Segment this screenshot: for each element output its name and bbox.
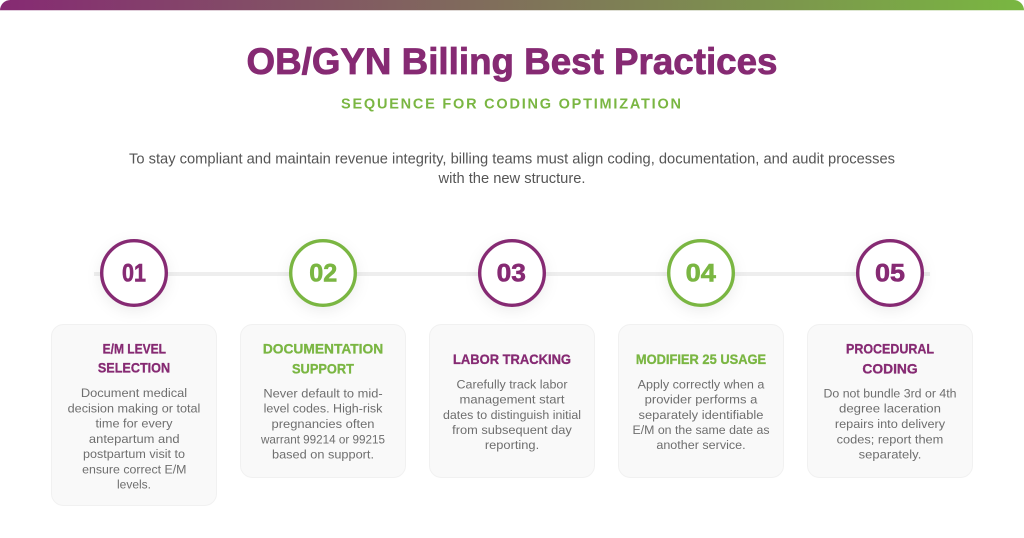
heading: documentation support [263, 342, 383, 376]
body text: modifier 25 usage: separately identifiable [638, 408, 764, 422]
top gradient bar [0, 0, 1024, 10]
panel: procedural coding [808, 324, 972, 478]
body text: procedural coding: separately. [859, 448, 921, 462]
body text: documentation support: level codes. High-risk [264, 402, 383, 416]
body text: labor tracking: reporting. [485, 438, 539, 452]
body text: modifier 25 usage: provider performs a [645, 393, 758, 407]
body text: labor tracking: Carefully track labor [456, 378, 568, 392]
step 04 marker: 04 [686, 260, 716, 288]
subtitle: SEQUENCE FOR CODING OPTIMIZATION [341, 96, 681, 112]
body text: modifier 25 usage: another service. [656, 438, 746, 452]
body text: labor tracking: management start [460, 393, 565, 407]
body text: documentation support: warrant 99214 or 99215 [260, 432, 385, 446]
step 03 marker [480, 241, 544, 305]
heading: procedural coding: PROCEDURAL [846, 342, 934, 357]
body text: E/M level selection: levels. [117, 477, 151, 491]
heading: labor tracking: LABOR TRACKING [453, 352, 571, 367]
body text: E/M level selection: antepartum and [89, 432, 180, 446]
body text: documentation support: Never default to mid- [263, 386, 383, 400]
panel: documentation support [240, 324, 406, 478]
body text: E/M level selection: Document medical [81, 386, 187, 400]
body text: labor tracking: dates to distinguish initial [443, 408, 581, 422]
body text: procedural coding: Do not bundle 3rd or 4th [824, 386, 957, 400]
heading: E/M level selection: SELECTION [98, 361, 170, 376]
heading: documentation support: SUPPORT [292, 361, 355, 376]
body text: procedural coding: repairs into delivery [835, 417, 946, 431]
heading: documentation support: DOCUMENTATION [263, 342, 383, 357]
title: OB/GYN Billing Best Practices [246, 41, 778, 82]
body text: E/M level selection: ensure correct E/M [82, 462, 186, 476]
body text: E/M level selection: postpartum visit to [83, 447, 185, 461]
heading: modifier 25 usage: MODIFIER 25 USAGE [636, 352, 766, 367]
panel: modifier 25 usage [618, 324, 784, 478]
step 02 marker: 02 [309, 260, 337, 288]
body text: documentation support [260, 386, 385, 462]
body text: modifier 25 usage: Apply correctly when a [638, 378, 765, 392]
body text: modifier 25 usage [632, 378, 770, 452]
intro text: To stay compliant and maintain revenue integrity, billing teams must align coding, documentation, and audit processes [129, 152, 895, 168]
step 05 marker: 05 [875, 260, 905, 288]
heading: procedural coding [846, 342, 934, 376]
heading: E/M level selection: E/M LEVEL [103, 341, 166, 356]
body text: E/M level selection: decision making or total [68, 401, 200, 415]
step 04 marker [669, 241, 733, 305]
panel: labor tracking [430, 324, 594, 478]
body text: procedural coding [824, 386, 957, 462]
timeline connector line [94, 272, 930, 276]
body text: procedural coding: codes; report them [837, 432, 943, 446]
step 03 marker: 03 [497, 260, 526, 288]
body text: procedural coding: degree laceration [839, 402, 941, 416]
intro text [129, 152, 895, 187]
intro text: with the new structure. [437, 171, 586, 187]
step 01 marker [102, 241, 166, 305]
body text: labor tracking [443, 378, 581, 452]
panel: E/M level selection [52, 324, 216, 506]
body text: labor tracking: from subsequent day [452, 423, 573, 437]
body text: documentation support: based on support. [272, 448, 374, 462]
body text: modifier 25 usage: E/M on the same date as [632, 423, 770, 437]
body text: E/M level selection [68, 386, 200, 491]
step 05 marker [858, 241, 922, 305]
step 01 marker: 01 [122, 260, 146, 288]
body text: documentation support: pregnancies often [272, 417, 375, 431]
heading: E/M level selection [98, 341, 170, 376]
body text: E/M level selection: time for every [96, 416, 173, 430]
step 02 marker [291, 241, 355, 305]
heading: procedural coding: CODING [862, 361, 918, 376]
